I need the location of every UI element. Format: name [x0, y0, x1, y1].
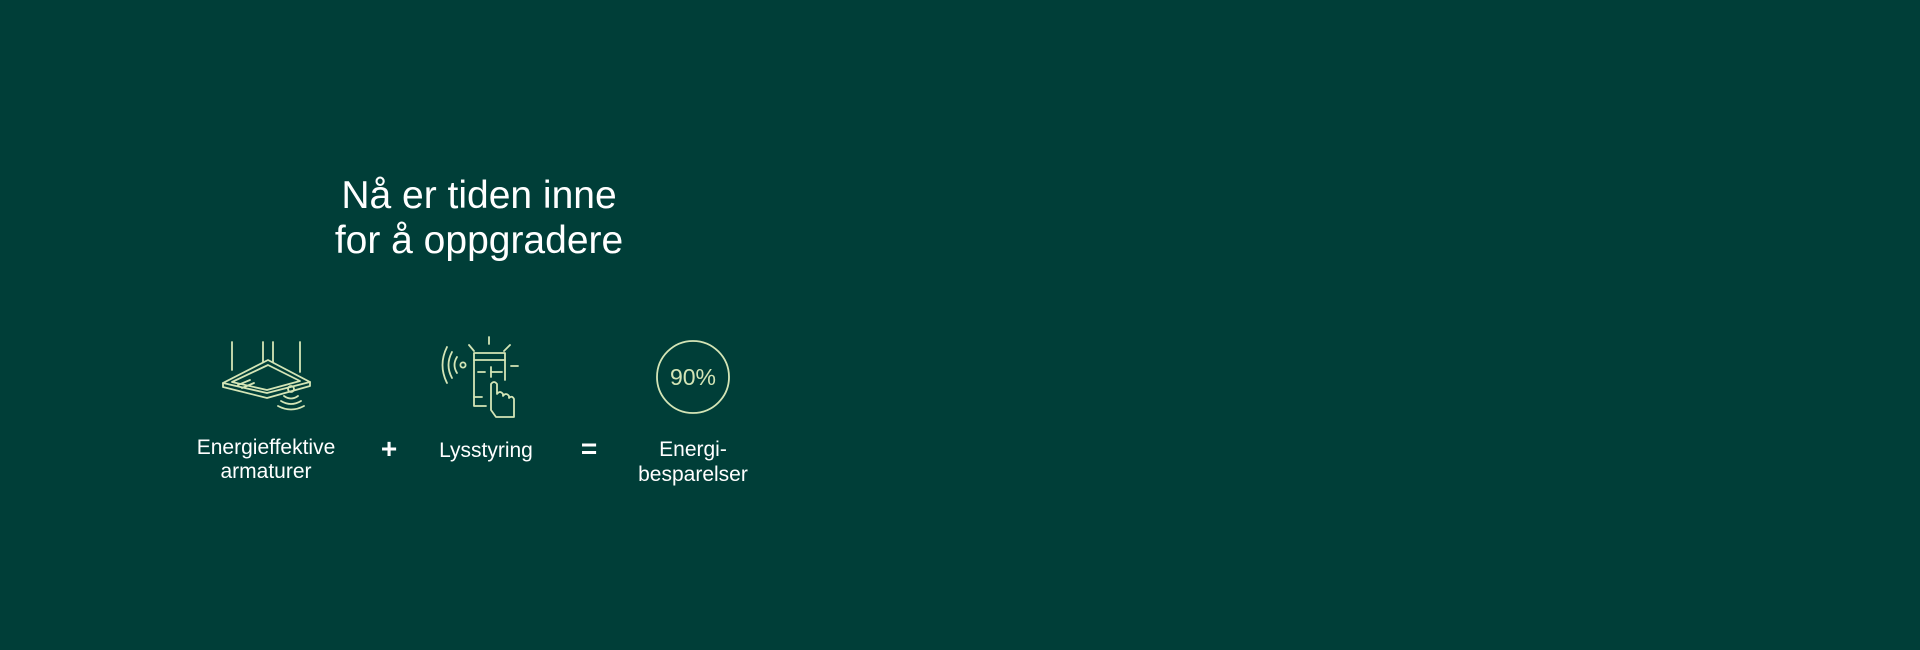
- label: energieffektive armaturer: armaturer: [220, 460, 312, 483]
- plus sign: +: [381, 433, 397, 464]
- equals sign: =: [581, 433, 597, 464]
- icon: light control remote with hand: [442, 337, 518, 417]
- label: energibesparelser: [638, 438, 748, 486]
- icon: ceiling luminaire: [223, 342, 310, 410]
- title: for å oppgradere: [335, 219, 623, 262]
- label: lysstyring: Lysstyring: [439, 439, 533, 462]
- title: [335, 174, 623, 262]
- icon: 90% circle: [657, 341, 729, 413]
- icon: 90% circle: 90%: [670, 364, 716, 390]
- label: energieffektive armaturer: Energieffektive: [197, 436, 335, 459]
- label: energieffektive armaturer: [197, 436, 335, 483]
- label: energibesparelser: Energi-: [659, 438, 727, 461]
- title: Nå er tiden inne: [341, 174, 617, 217]
- label: energibesparelser: besparelser: [638, 463, 748, 486]
